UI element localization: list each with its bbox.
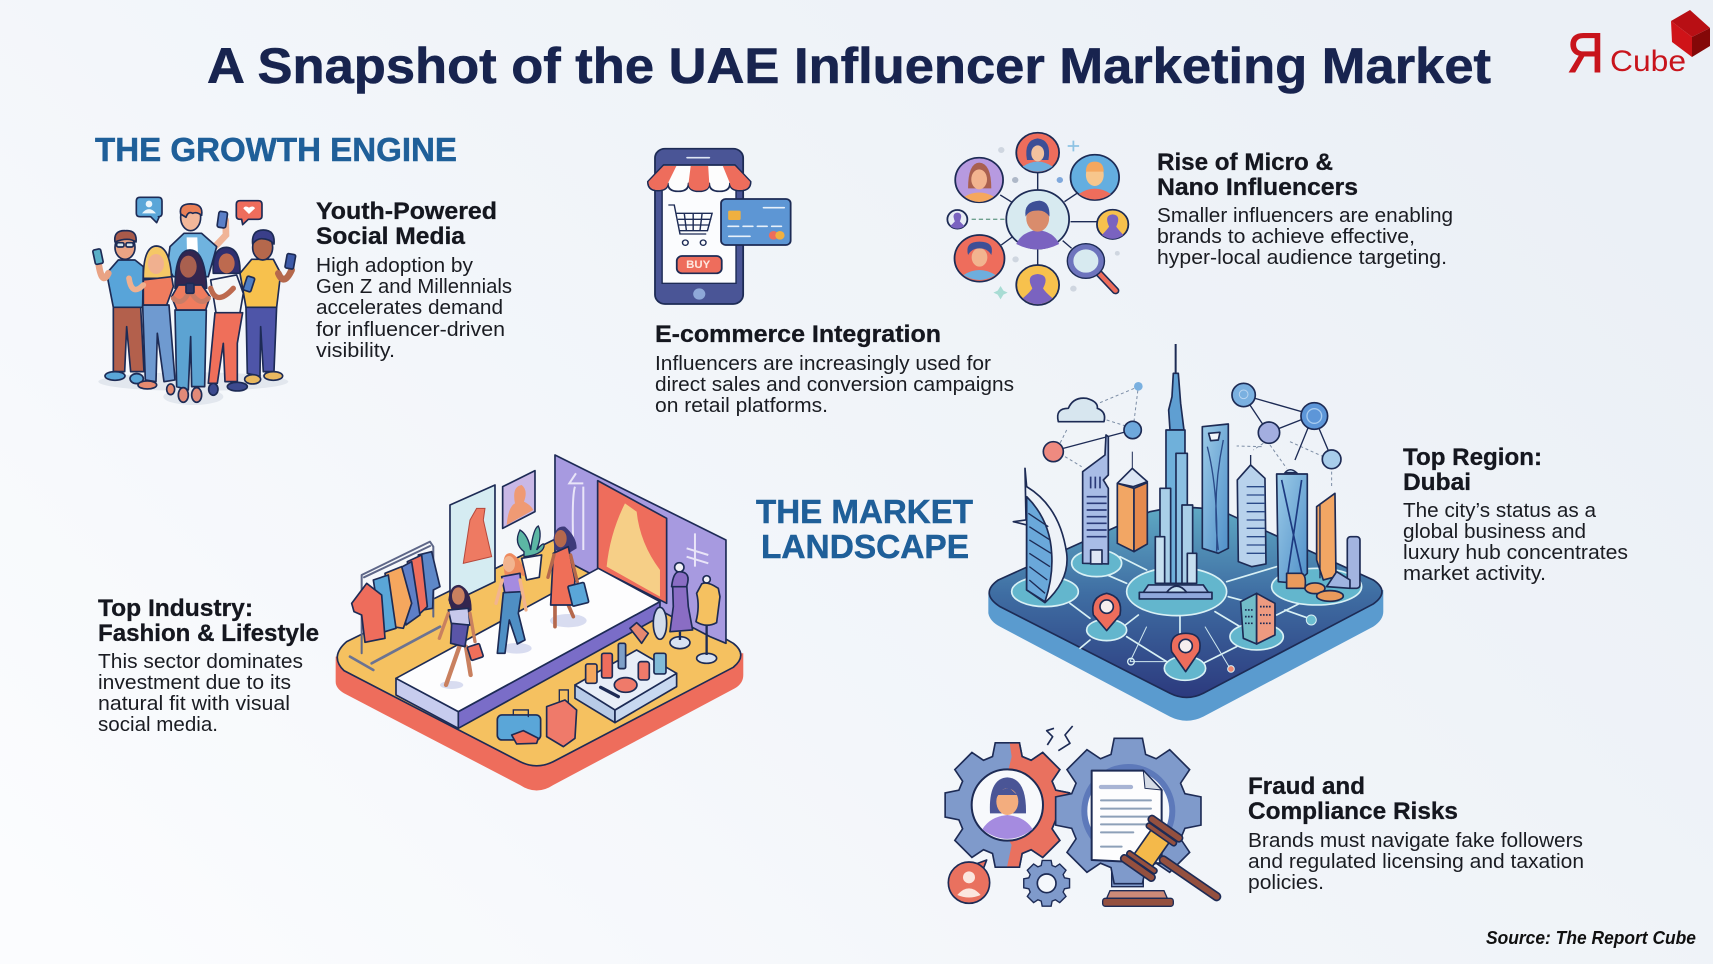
text: youth-powered social media (316, 198, 512, 362)
text: top region dubai: market activity. (1403, 563, 1546, 585)
text: top industry fashion and lifestyle: social media. (98, 714, 218, 736)
text: rise of micro and nano influencers: brands to achieve effective, (1157, 226, 1415, 248)
text: youth-powered social media: Social Media (316, 223, 465, 250)
text: fraud and compliance risks: Brands must navigate fake followers (1248, 830, 1583, 852)
text: fraud and compliance risks: and regulated licensing and taxation (1248, 851, 1584, 873)
text: top industry fashion and lifestyle: investment due to its (98, 672, 291, 694)
text: youth-powered social media: Gen Z and Millennials (316, 276, 512, 298)
text: top region dubai (1403, 444, 1628, 585)
text: fraud and compliance risks: Fraud and (1248, 773, 1365, 800)
text: youth-powered social media: accelerates demand (316, 297, 503, 319)
text: top region dubai: Dubai (1403, 469, 1471, 496)
text: top industry fashion and lifestyle (98, 595, 319, 736)
text: fraud and compliance risks (1248, 773, 1584, 894)
text: e-commerce integration: direct sales and conversion campaigns (655, 374, 1014, 396)
text: rise of micro and nano influencers: Nano Influencers (1157, 174, 1358, 201)
text: youth-powered social media: High adoption by (316, 255, 473, 277)
text: fraud and compliance risks: Compliance Risks (1248, 798, 1458, 825)
text: fraud and compliance risks: policies. (1248, 872, 1324, 894)
text: youth-powered social media: for influencer-driven (316, 319, 505, 341)
icon: phone storefront with card: BUY (686, 259, 711, 271)
text: youth-powered social media: visibility. (316, 340, 395, 362)
text: top region dubai: The city’s status as a (1403, 500, 1597, 522)
illustration: group of young people using phones (93, 197, 296, 405)
logo: RCube (1567, 10, 1710, 84)
illustration: isometric fashion retail platform (336, 455, 743, 790)
text: rise of micro and nano influencers: Rise of Micro & (1157, 149, 1333, 176)
heading: the growth engine: THE GROWTH ENGINE (95, 131, 457, 168)
text: top region dubai: global business and (1403, 521, 1586, 543)
icon: gears with document and gavel (945, 726, 1217, 906)
text: top industry fashion and lifestyle: This sector dominates (98, 651, 303, 673)
illustration: isometric Dubai skyline on a smart city platform (988, 344, 1383, 721)
title: A Snapshot of the UAE Influencer Marketing Market (207, 38, 1491, 94)
logo: RCube: Я (1567, 21, 1604, 84)
text: rise of micro and nano influencers: Smaller influencers are enabling (1157, 205, 1453, 227)
source note: Source: The Report Cube (1486, 928, 1696, 948)
heading: the market landscape: LANDSCAPE (761, 528, 969, 565)
icon: phone storefront with card (648, 149, 791, 304)
text: e-commerce integration (655, 321, 1014, 417)
logo: RCube: Cube (1610, 45, 1686, 78)
heading: the market landscape (756, 493, 973, 565)
text: top region dubai: luxury hub concentrates (1403, 542, 1628, 564)
text: e-commerce integration: on retail platforms. (655, 395, 828, 417)
text: top industry fashion and lifestyle: Top Industry: (98, 595, 253, 622)
icon: influencer network (947, 133, 1128, 305)
text: rise of micro and nano influencers: hyper-local audience targeting. (1157, 247, 1447, 269)
text: top industry fashion and lifestyle: Fashion & Lifestyle (98, 620, 319, 647)
text: youth-powered social media: Youth-Powered (316, 198, 497, 225)
text: e-commerce integration: Influencers are increasingly used for (655, 353, 991, 375)
text: rise of micro and nano influencers (1157, 149, 1453, 269)
text: top industry fashion and lifestyle: natural fit with visual (98, 693, 290, 715)
text: top region dubai: Top Region: (1403, 444, 1542, 471)
text: e-commerce integration: E-commerce Integration (655, 321, 941, 348)
heading: the market landscape: THE MARKET (756, 493, 973, 530)
